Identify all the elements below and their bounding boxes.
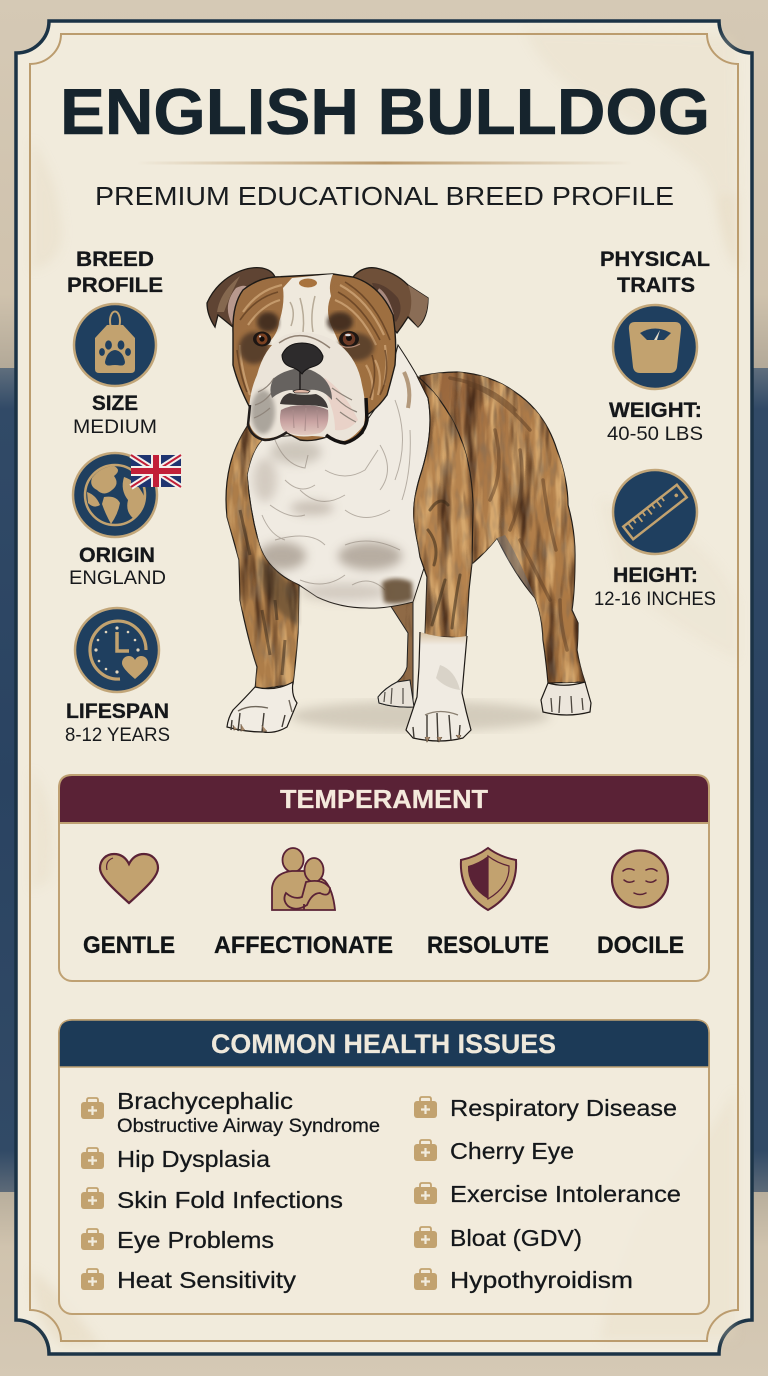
heading: physical traits: TRAITS [617, 274, 695, 297]
label: resolute: RESOLUTE [427, 932, 549, 959]
eyes [253, 331, 360, 347]
label: docile: DOCILE [597, 932, 684, 959]
temperament heading: TEMPERAMENT [280, 784, 488, 814]
value: height: 12-16 INCHES [594, 589, 716, 610]
heading: breed profile: BREED [76, 248, 154, 271]
icon: heart [100, 854, 158, 903]
label: affectionate: AFFECTIONATE [214, 932, 393, 959]
value: medium: MEDIUM [73, 417, 157, 438]
issue: heat sensitivity: Heat Sensitivity [117, 1267, 297, 1293]
title: ENGLISH BULLDOG [60, 75, 710, 148]
icon: tag with paw [74, 304, 156, 386]
head [233, 274, 396, 443]
issue: eye problems: Eye Problems [117, 1227, 274, 1253]
issue: brachycephalic [81, 1088, 380, 1137]
heading: breed profile: PROFILE [67, 274, 163, 297]
pink chin [280, 405, 328, 435]
title divider [137, 162, 632, 164]
issue: exercise intolerance: Exercise Intolerance [450, 1181, 681, 1207]
panel: physical traits [594, 248, 716, 610]
value: years: 8-12 YEARS [65, 725, 170, 746]
upper lip shadow [270, 368, 332, 400]
panel: common health issues [59, 1020, 709, 1314]
heading: physical traits: PHYSICAL [600, 248, 710, 271]
health header bar [59, 1020, 709, 1067]
panel: breed profile [65, 248, 181, 746]
label: origin: ORIGIN [79, 544, 155, 567]
icon: calm face [612, 850, 668, 908]
issue: brachycephalic: Brachycephalic [117, 1088, 293, 1114]
issue: hip dysplasia: Hip Dysplasia [117, 1146, 270, 1172]
label: size: SIZE [92, 392, 138, 415]
rear leg and barrel [420, 370, 595, 715]
nose [282, 343, 323, 374]
near left leg [224, 425, 302, 732]
issue: skin fold infections: Skin Fold Infections [117, 1187, 343, 1213]
issue: bloat: Bloat (GDV) [450, 1225, 582, 1251]
label: gentle: GENTLE [83, 932, 175, 959]
subtitle: PREMIUM EDUCATIONAL BREED PROFILE [95, 181, 674, 211]
near front leg [406, 375, 476, 742]
left column of issues [81, 1088, 380, 1293]
value: weight: 40-50 LBS [607, 424, 703, 445]
issue: cherry eye: Cherry Eye [450, 1138, 574, 1164]
value: england: ENGLAND [69, 568, 166, 589]
icon: shield [461, 848, 516, 910]
illustration: english bulldog standing [207, 268, 595, 742]
health heading: COMMON HEALTH ISSUES [211, 1029, 556, 1059]
temperament header bar [59, 775, 709, 823]
icon: clock with heart [75, 608, 159, 692]
white chest and belly [247, 345, 430, 608]
label: weight: WEIGHT: [609, 399, 702, 422]
issue: brachycephalic: Obstructive Airway Syndrome [117, 1116, 380, 1137]
icon: weighing scale [613, 305, 697, 389]
right column of issues [414, 1095, 681, 1293]
label: lifespan: LIFESPAN [66, 700, 169, 723]
issue: respiratory disease: Respiratory Disease [450, 1095, 677, 1121]
icon: hugging figures [272, 848, 335, 910]
label: height: HEIGHT: [613, 564, 698, 587]
ears [207, 268, 428, 333]
lower lip dark band [280, 393, 328, 408]
far front leg [378, 600, 415, 707]
icon: globe with UK flag [73, 453, 181, 537]
panel: temperament [59, 775, 709, 981]
muzzle and jowls [248, 332, 367, 443]
issue: hypothyroidism: Hypothyroidism [450, 1267, 633, 1293]
icon: ruler [613, 470, 697, 554]
